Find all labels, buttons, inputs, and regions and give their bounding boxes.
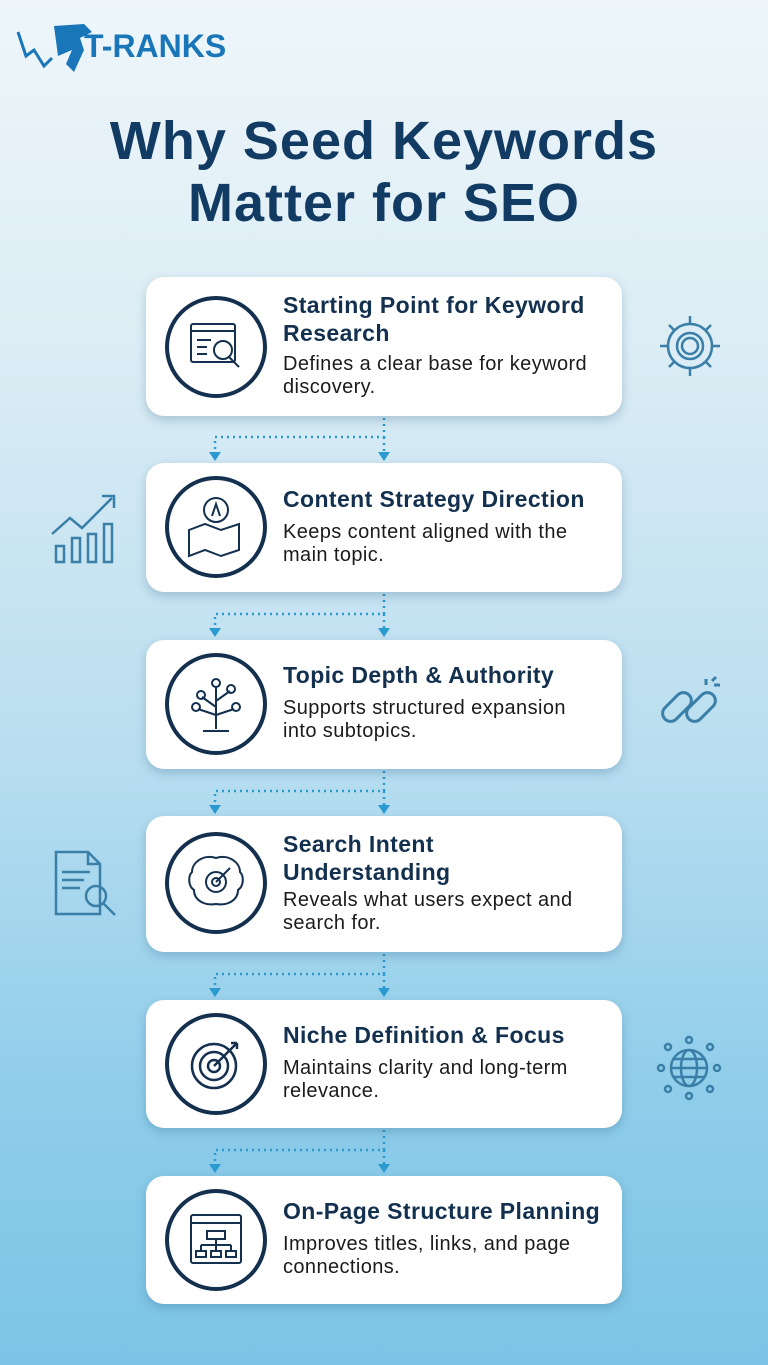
icon: document search	[54, 850, 116, 916]
title: Matter for SEO	[188, 173, 580, 233]
icon: compass map	[165, 476, 267, 578]
icon: globe network	[656, 1036, 722, 1100]
logo: T-RANKS	[84, 28, 226, 64]
icon: growth chart	[51, 494, 116, 564]
card 6: Improves titles, links, and page	[283, 1233, 570, 1255]
card 1: Research	[283, 320, 390, 346]
card 4: search for.	[283, 912, 381, 934]
card 4: Reveals what users expect and	[283, 889, 573, 911]
icon: target	[165, 1013, 267, 1115]
card 1: Starting Point for Keyword	[283, 292, 585, 318]
card 2	[146, 463, 622, 592]
card 3: Topic Depth & Authority	[283, 662, 554, 688]
icon: tree	[165, 653, 267, 755]
card 5: Niche Definition & Focus	[283, 1022, 565, 1048]
card 6: On-Page Structure Planning	[283, 1198, 600, 1224]
icon: link	[661, 676, 720, 723]
logo	[16, 24, 226, 72]
card 6	[146, 1176, 622, 1304]
card 4: Search Intent	[283, 831, 434, 857]
card 3	[146, 640, 622, 769]
card 5: relevance.	[283, 1080, 379, 1102]
title	[110, 111, 658, 233]
card 1: Defines a clear base for keyword	[283, 353, 587, 375]
card 3: Supports structured expansion	[283, 697, 566, 719]
card 2: main topic.	[283, 544, 384, 566]
card 1: discovery.	[283, 376, 376, 398]
card 1	[146, 277, 622, 416]
icon: browser search	[165, 296, 267, 398]
card 2: Content Strategy Direction	[283, 486, 585, 512]
card 4	[146, 816, 622, 952]
card 6: connections.	[283, 1256, 400, 1278]
card 5: Maintains clarity and long-term	[283, 1057, 568, 1079]
card 2: Keeps content aligned with the	[283, 521, 567, 543]
icon: brain target	[165, 832, 267, 934]
card 5	[146, 1000, 622, 1128]
icon: gear	[660, 316, 720, 376]
icon: page structure	[165, 1189, 267, 1291]
card 3: into subtopics.	[283, 720, 417, 742]
title: Why Seed Keywords	[110, 111, 658, 171]
card 4: Understanding	[283, 859, 450, 885]
